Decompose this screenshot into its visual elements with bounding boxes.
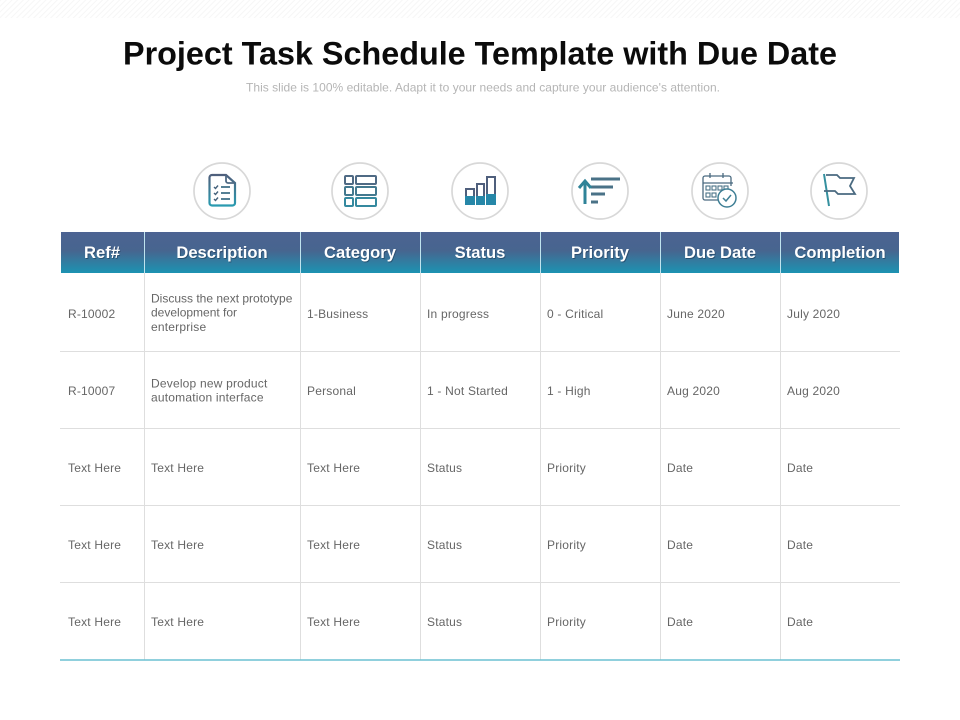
icon: calendar with check [692,163,748,219]
table header row: Priority [571,243,630,262]
subtitle: This slide is 100% editable. Adapt it to your needs and capture your audience's attention. [246,80,720,94]
row 3: Text Here [307,461,360,475]
row 1: July 2020 [787,307,840,321]
table [60,232,900,660]
table header row: Priority [572,244,631,263]
row 4: Status [427,538,462,552]
row 2: 1 - High [547,384,591,398]
row 1 [68,292,840,334]
row 2: Develop new product [151,376,268,390]
row 3: Text Here [151,461,204,475]
row 5: Text Here [68,615,121,629]
icon: bar chart [452,163,508,219]
row 4 [68,538,813,552]
row 2: automation interface [151,390,264,404]
row 2: Personal [307,384,356,398]
row 1: development for [151,306,237,320]
row 5: Text Here [307,615,360,629]
row 1: 0 - Critical [547,307,603,321]
icon: priority sort arrow [572,163,628,219]
row 5: Status [427,615,462,629]
table header row: Ref# [84,243,120,262]
table grid [60,273,900,660]
row 1: R-10002 [68,307,116,321]
row 1: June 2020 [667,307,725,321]
row 1: In progress [427,307,489,321]
row 4: Text Here [151,538,204,552]
table header row: Status [455,244,506,263]
table header row: Ref# [85,244,121,263]
row 1: Discuss the next prototype [151,292,293,306]
table header row: Status [455,243,505,262]
row 2 [68,376,840,404]
row 2: 1 - Not Started [427,384,508,398]
row 3: Priority [547,461,586,475]
icon: list table [332,163,388,219]
row 2: Aug 2020 [787,384,840,398]
icon: flag [811,163,867,219]
table header row: Category [324,243,397,262]
table header row [61,232,899,273]
row 3: Date [667,461,693,475]
row 4: Priority [547,538,586,552]
table header row: Category [325,244,398,263]
table header row: Completion [795,244,886,263]
row 5: Date [787,615,813,629]
row 2: Aug 2020 [667,384,720,398]
row 1: 1-Business [307,307,368,321]
row 2: R-10007 [68,384,116,398]
row 5 [68,615,813,629]
row 1: enterprise [151,320,206,334]
icon: checklist document [194,163,250,219]
row 4: Date [787,538,813,552]
row 4: Text Here [68,538,121,552]
icon row [194,163,867,219]
table header row: Completion [794,243,886,262]
table header row: Description [177,244,268,263]
row 4: Text Here [307,538,360,552]
table header row: Description [176,243,268,262]
row 5: Text Here [151,615,204,629]
row 3: Date [787,461,813,475]
row 5: Priority [547,615,586,629]
row 5: Date [667,615,693,629]
table header row: Due Date [684,243,756,262]
row 4: Date [667,538,693,552]
table header row: Due Date [685,244,757,263]
title: Project Task Schedule Template with Due Date [123,36,837,72]
row 3 [68,461,813,475]
row 3: Status [427,461,462,475]
row 3: Text Here [68,461,121,475]
